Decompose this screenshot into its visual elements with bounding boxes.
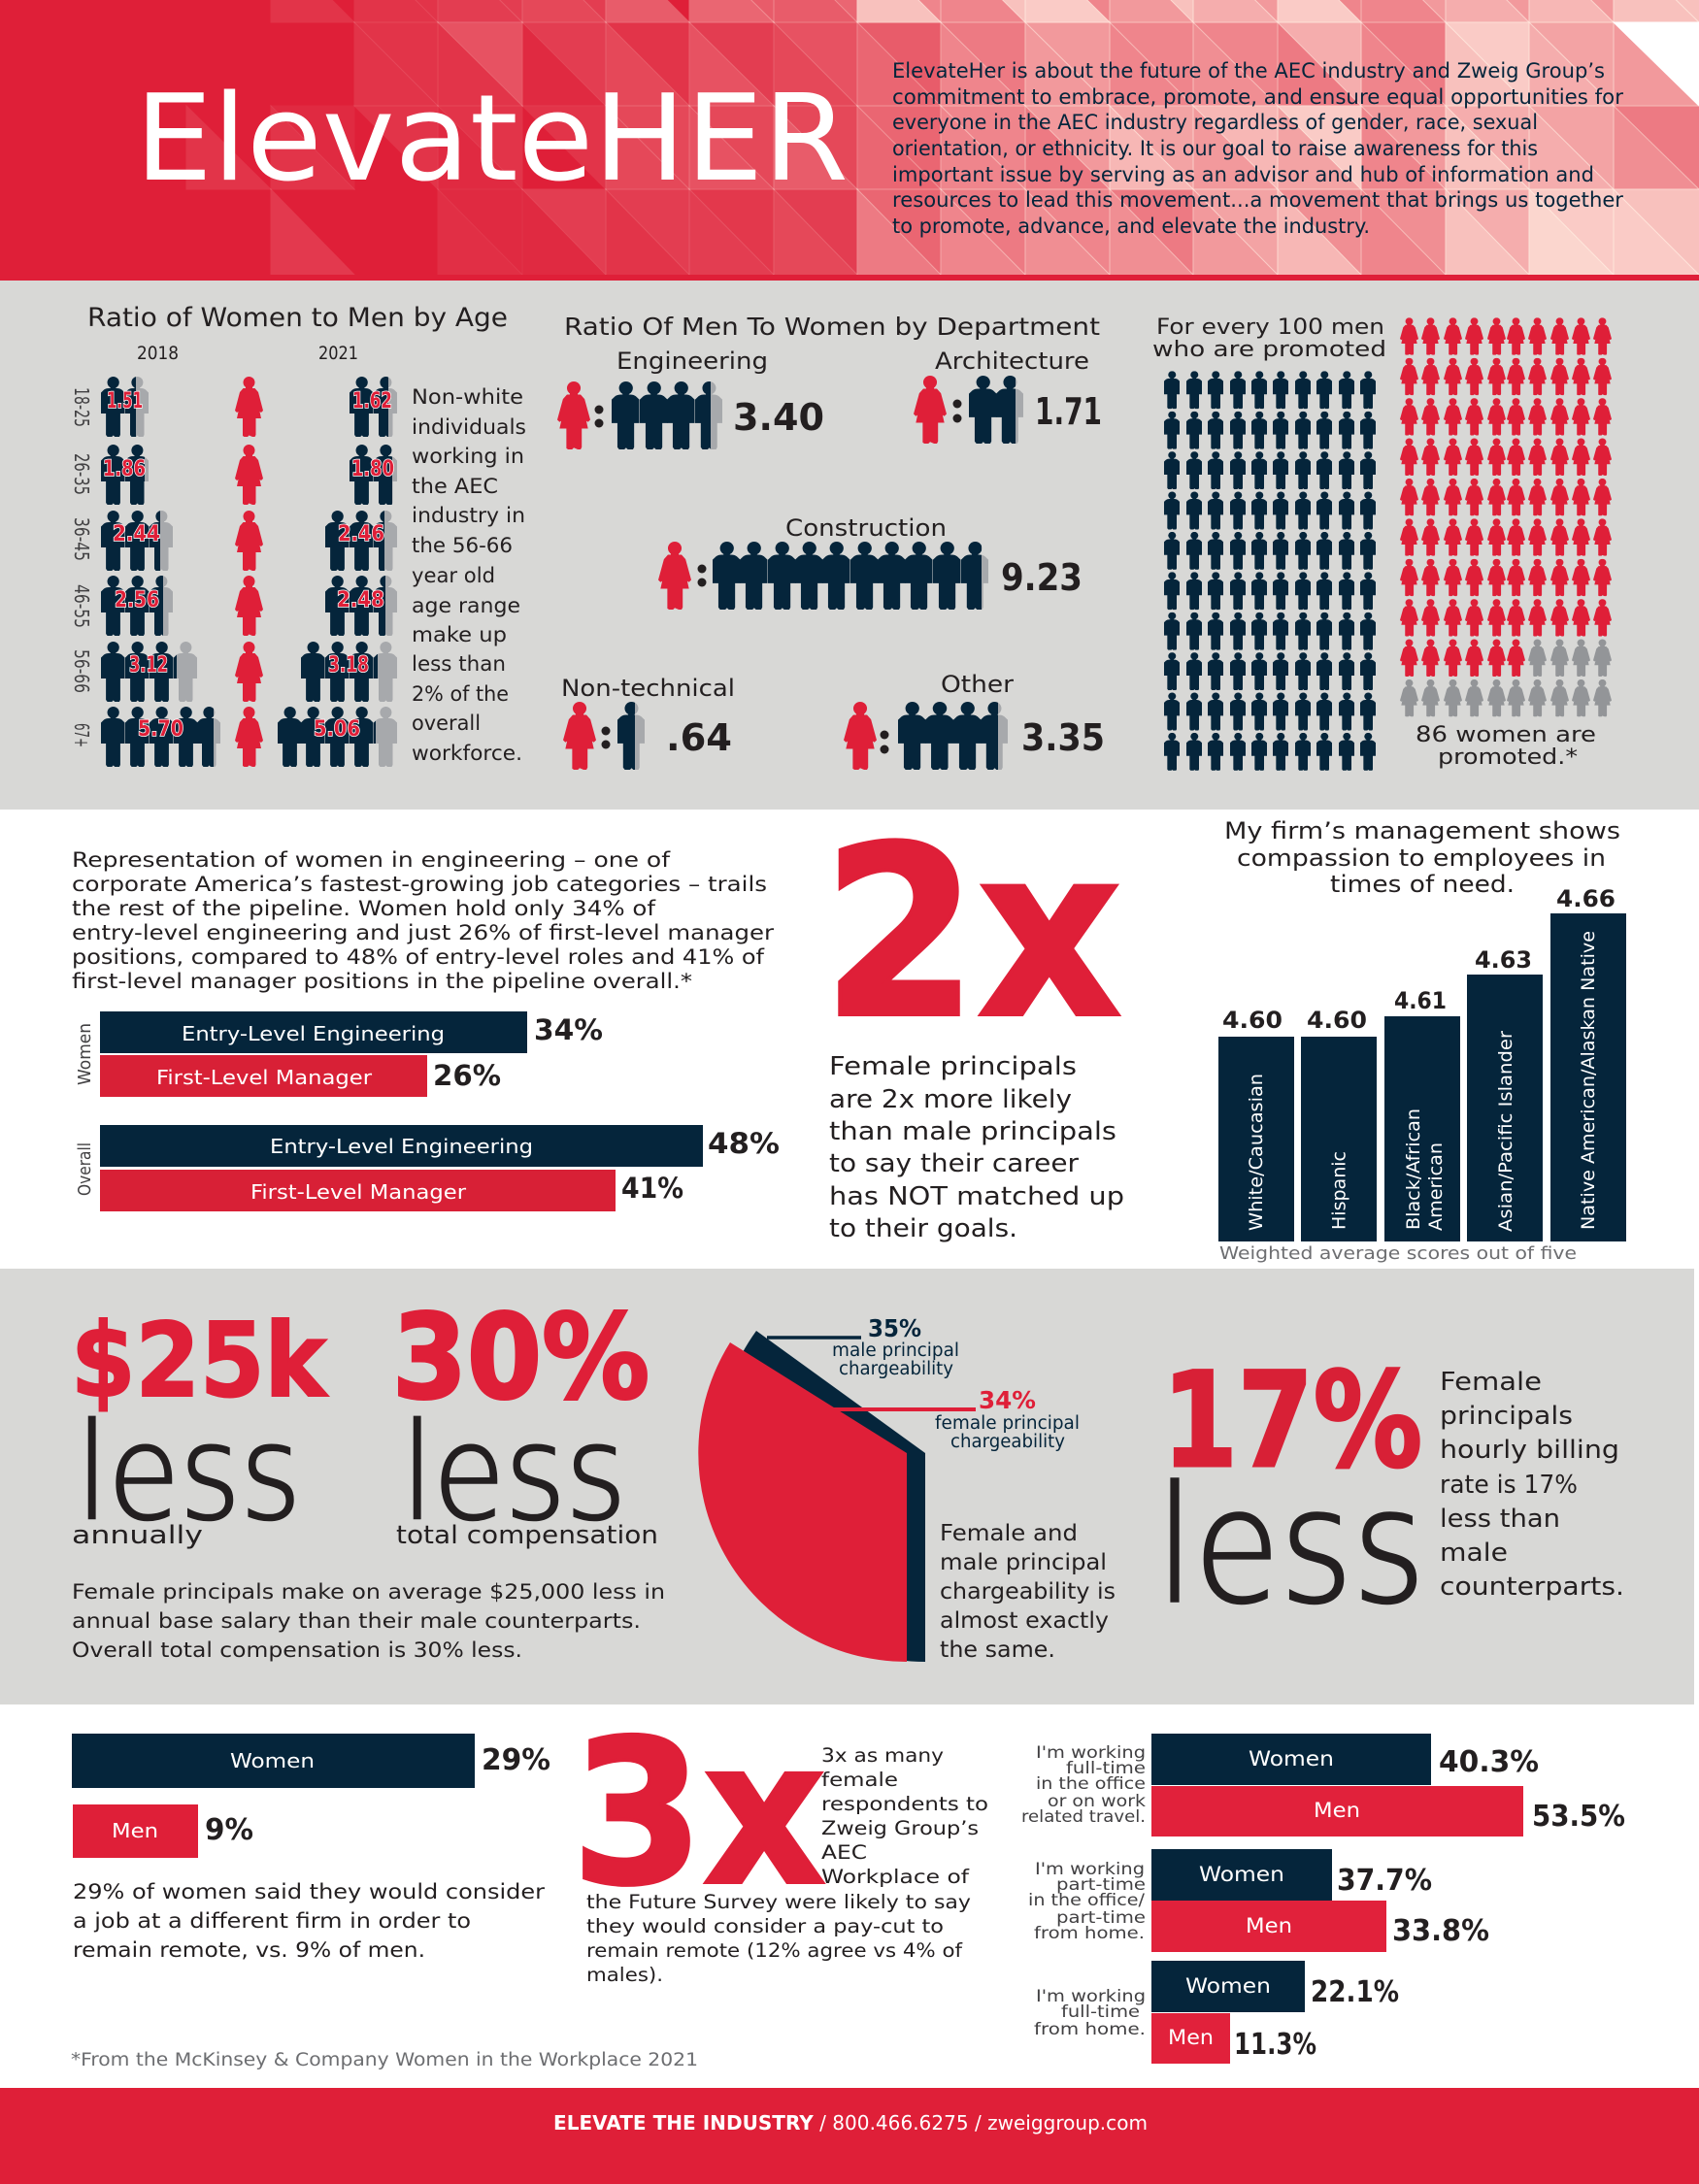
heading: Ratio Of Men To Women by Department <box>564 313 1100 341</box>
remote note: 29% of women said they would consider <box>73 1880 545 1904</box>
chart note: Weighted average scores out of five <box>1219 1243 1577 1264</box>
remote note: remain remote, vs. 9% of men. <box>73 1938 425 1963</box>
panel: engineering representation <box>72 848 780 1211</box>
description <box>72 1580 665 1663</box>
bar chart: work location: full-time <box>1066 1759 1146 1778</box>
stat: $25k less <box>71 1302 328 1555</box>
footnote: *From the McKinsey & Company Women in the Workplace 2021 <box>71 2050 698 2070</box>
bar chart: remote preference: 29% <box>482 1743 550 1777</box>
description: Overall total compensation is 30% less. <box>72 1638 522 1663</box>
header intro text: resources to lead this movement...a movement that brings us together <box>892 188 1623 212</box>
stat: 17% less: 17% <box>1162 1344 1422 1497</box>
heading: times of need. <box>1330 871 1515 898</box>
body text: positions, compared to 48% of entry-level roles and 41% of <box>72 945 765 969</box>
body text: the rest of the pipeline. Women hold only 34% of <box>72 897 656 920</box>
ratio values: 1.80 <box>351 457 394 481</box>
3x note: respondents to <box>821 1793 988 1815</box>
ratio values: 2.48 <box>337 588 384 612</box>
bar chart: representation: Entry-Level Engineering <box>270 1135 533 1158</box>
non-white note <box>412 385 526 765</box>
chargeability note: Female and <box>940 1521 1078 1546</box>
non-white note: Non-white <box>412 385 523 409</box>
bar values <box>1222 885 1616 1034</box>
caption women <box>1416 723 1596 770</box>
remote note: a job at a different firm in order to <box>73 1909 471 1934</box>
other: Other <box>941 671 1014 698</box>
center women icons <box>235 377 263 767</box>
section: ratio of women to men by age <box>70 303 526 767</box>
non-white note: year old <box>412 564 495 587</box>
non-white note: workforce. <box>412 742 522 765</box>
ratio values: 2.56 <box>115 588 159 612</box>
body text: corporate America’s fastest-growing job categories – trails <box>72 873 767 896</box>
heading: My firm’s management shows <box>1224 817 1620 844</box>
navy men icons 2018 <box>101 377 220 767</box>
ratio values: 1.62 <box>352 389 392 414</box>
billing rate note <box>1440 1368 1624 1602</box>
architecture: Architecture <box>935 347 1089 375</box>
stat: $25k less: $25k <box>71 1302 328 1420</box>
header intro text: ElevateHer is about the future of the AEC industry and Zweig Group’s <box>892 59 1605 83</box>
label: female chargeability: 34% <box>979 1386 1036 1414</box>
billing rate note: principals <box>1440 1402 1573 1431</box>
ratio values: 1.86 <box>103 457 146 481</box>
big number: 2x <box>822 797 1121 1071</box>
stat: 30% less <box>392 1291 658 1555</box>
label: male chargeability: chargeability <box>839 1359 953 1379</box>
age labels: 67+ <box>70 723 93 747</box>
column labels: 2018 <box>137 343 179 364</box>
engineering: Engineering <box>616 347 768 375</box>
bar chart: work location: 11.3% <box>1234 2028 1316 2062</box>
grid: 86 women <box>1400 317 1612 677</box>
heading men: For every 100 men <box>1156 315 1384 340</box>
bar labels: American <box>1425 1142 1447 1231</box>
ratio values: 2.46 <box>338 522 384 546</box>
bar chart: work location: part-time <box>1056 1875 1146 1895</box>
bar chart: work location: Men <box>1168 2026 1214 2049</box>
bar chart: work location: full-time <box>1061 2002 1140 2022</box>
description: Female principals make on average $25,000 less in <box>72 1580 665 1605</box>
engineering <box>557 347 824 449</box>
header intro text: everyone in the AEC industry regardless of gender, race, sexual <box>892 111 1538 134</box>
ratio values: 5.70 <box>138 717 183 742</box>
non-white note: the AEC <box>412 475 498 498</box>
billing rate note: counterparts. <box>1440 1572 1624 1602</box>
panel: remote work <box>71 1699 1625 2070</box>
non-white note: industry in <box>412 504 525 527</box>
chargeability note: the same. <box>940 1638 1055 1663</box>
heading <box>1224 817 1620 898</box>
bar chart: work location: 33.8% <box>1392 1914 1489 1948</box>
body text <box>72 848 774 993</box>
header intro text: commitment to embrace, promote, and ensure equal opportunities for <box>892 85 1623 109</box>
3x note: Workplace of <box>821 1866 970 1888</box>
stat: $25k less: less <box>76 1391 301 1555</box>
bar chart: work location: I'm working <box>1035 1860 1145 1879</box>
non-white note: overall <box>412 711 481 735</box>
bar chart: work location: 37.7% <box>1337 1864 1432 1898</box>
age labels <box>70 387 93 747</box>
bar chart: work location: in the office/ <box>1028 1891 1145 1910</box>
architecture: 1.71 <box>1035 390 1102 433</box>
bar chart: representation: Women <box>75 1023 95 1085</box>
stat: 30% less: less <box>401 1391 626 1555</box>
bar chart: work location: related travel. <box>1021 1807 1146 1827</box>
label: male chargeability <box>832 1314 959 1379</box>
bar labels: Asian/Pacific Islander <box>1495 1031 1516 1232</box>
bar chart: work location: Men <box>1314 1799 1360 1822</box>
3x note: Zweig Group’s <box>821 1817 979 1839</box>
grid: grey remainder women <box>1400 639 1612 716</box>
description: than male principals <box>829 1117 1116 1146</box>
stat: 17% less <box>1155 1344 1425 1645</box>
caption women: 86 women are <box>1416 723 1596 747</box>
bar chart: representation: 48% <box>708 1127 780 1160</box>
header intro text: important issue by serving as an advisor and hub of information and <box>892 163 1594 186</box>
non-white note: make up <box>412 623 507 646</box>
bar labels: Black/African <box>1403 1109 1424 1230</box>
bar labels <box>1246 931 1599 1232</box>
age labels: 26-35 <box>70 453 93 495</box>
billing rate note: male <box>1440 1539 1508 1568</box>
ratio values: 3.12 <box>129 653 168 678</box>
bar values: 4.60 <box>1222 1007 1283 1034</box>
grid: 100 men <box>1164 371 1376 771</box>
construction <box>658 514 1083 610</box>
3x note: female <box>821 1769 898 1791</box>
band background <box>0 1269 1694 1704</box>
chargeability note: almost exactly <box>940 1608 1109 1634</box>
label: male chargeability: 35% <box>868 1314 921 1342</box>
bar chart: work location: 53.5% <box>1532 1800 1625 1834</box>
column labels <box>137 343 358 364</box>
description: Female principals <box>829 1052 1077 1081</box>
non-white note: individuals <box>412 415 526 439</box>
construction: 9.23 <box>1001 556 1083 599</box>
heading: compassion to employees in <box>1237 844 1606 872</box>
heading men: who are promoted <box>1152 338 1386 362</box>
bar chart: remote preference <box>72 1734 550 1858</box>
bar chart: work location: in the office <box>1036 1774 1146 1794</box>
3x note: remain remote (12% agree vs 4% of <box>586 1939 963 1962</box>
section: promotions <box>1152 315 1612 771</box>
header triangle pattern <box>186 0 1699 275</box>
description: to say their career <box>829 1149 1079 1178</box>
non-technical <box>561 675 735 770</box>
ratio values: 1.51 <box>107 389 143 414</box>
label: female chargeability: female principal <box>935 1413 1080 1434</box>
age labels: 56-66 <box>70 649 93 693</box>
panel: ratios band <box>0 281 1699 810</box>
billing rate note: rate is 17% <box>1440 1471 1578 1500</box>
bar chart: work location: from home. <box>1034 1924 1145 1943</box>
grey remainder icons <box>125 377 397 767</box>
bar values: 4.60 <box>1307 1007 1367 1034</box>
3x note: the Future Survey were likely to say <box>586 1891 971 1913</box>
body text: first-level manager positions in the pipeline overall.* <box>72 970 692 993</box>
column labels: 2021 <box>318 343 358 364</box>
3x note: males). <box>586 1964 663 1986</box>
footer contact text: ELEVATE THE INDUSTRY / 800.466.6275 / zweiggroup.com <box>553 2111 1148 2134</box>
description <box>829 1052 1124 1243</box>
description: annual base salary than their male counterparts. <box>72 1609 641 1634</box>
title: ElevateHER <box>135 70 849 209</box>
ratio values: 3.18 <box>328 653 369 678</box>
architecture <box>914 347 1102 444</box>
bar chart: remote preference: Women <box>230 1749 315 1772</box>
billing rate note: hourly billing <box>1440 1436 1619 1465</box>
age labels: 46-55 <box>70 584 93 628</box>
ratio values <box>103 389 394 742</box>
age labels: 36-45 <box>70 517 93 561</box>
caption women: promoted.* <box>1438 745 1578 770</box>
bar chart: representation: First-Level Manager <box>250 1180 467 1204</box>
band background <box>0 281 1699 810</box>
construction: Construction <box>785 514 947 542</box>
bar values: 4.61 <box>1394 987 1447 1014</box>
pie chart: chargeability <box>698 1331 976 1662</box>
chargeability note <box>940 1521 1116 1663</box>
stat: $25k less: annually <box>72 1521 203 1550</box>
chargeability note: chargeability is <box>940 1579 1116 1605</box>
stat: 30% less: total compensation <box>396 1521 658 1550</box>
non-white note: working in <box>412 445 524 468</box>
ratio values: 5.06 <box>314 717 360 742</box>
header intro text: orientation, or ethnicity. It is our goal to raise awareness for this <box>892 137 1538 160</box>
bar labels: White/Caucasian <box>1246 1074 1267 1231</box>
bar values: 4.66 <box>1556 885 1616 912</box>
engineering: 3.40 <box>733 396 824 439</box>
panel: 2x stat <box>822 797 1124 1243</box>
bar chart: representation <box>75 1011 780 1211</box>
bar chart: remote preference: Men <box>112 1819 158 1842</box>
bar chart: work location: 22.1% <box>1311 1975 1399 2009</box>
footer band <box>0 2088 1699 2184</box>
section: ratio of men to women by department <box>557 313 1105 770</box>
bar chart: work location: Women <box>1249 1747 1334 1770</box>
3x note: AEC <box>821 1841 867 1864</box>
bar chart: representation: 41% <box>621 1172 683 1205</box>
heading: Ratio of Women to Men by Age <box>87 303 508 333</box>
bar chart: representation: Entry-Level Engineering <box>182 1022 445 1045</box>
billing rate note: less than <box>1440 1505 1560 1534</box>
bar chart: representation: Overall <box>75 1142 95 1196</box>
header intro text: to promote, advance, and elevate the industry. <box>892 215 1370 238</box>
panel: management compassion chart <box>1218 817 1626 1264</box>
bar chart: representation: 26% <box>433 1059 501 1092</box>
header bottom strip <box>0 275 1699 281</box>
non-white note: 2% of the <box>412 682 509 706</box>
bar chart: work location <box>1021 1734 1625 2064</box>
bar chart: work location: I'm working <box>1036 1743 1146 1763</box>
stat: 3x: 3x <box>572 1699 825 1930</box>
3x note <box>586 1744 988 1986</box>
remote note <box>73 1880 545 1963</box>
bar chart: work location: I'm working <box>1036 1987 1146 2006</box>
bar labels: Hispanic <box>1328 1151 1349 1230</box>
chargeability note: male principal <box>940 1550 1107 1575</box>
panel: pay gap band <box>0 1269 1694 1704</box>
non-white note: age range <box>412 594 520 617</box>
age labels: 18-25 <box>70 387 93 427</box>
bar chart: work location: or on work <box>1048 1792 1146 1811</box>
label: male chargeability: male principal <box>832 1340 959 1361</box>
bar chart: work location: 40.3% <box>1439 1745 1539 1779</box>
body text: Representation of women in engineering – one of <box>72 848 671 872</box>
navy men icons 2021 <box>278 377 397 767</box>
header red background <box>0 0 1699 281</box>
bars <box>1218 913 1626 1241</box>
3x note: they would consider a pay-cut to <box>586 1915 944 1937</box>
ratio values: 2.44 <box>113 522 160 546</box>
description: are 2x more likely <box>829 1085 1072 1114</box>
panel: header <box>0 0 1699 281</box>
label: female chargeability <box>935 1386 1080 1452</box>
bar chart: remote preference: 9% <box>205 1813 253 1847</box>
non-technical: .64 <box>666 716 732 759</box>
label: female chargeability: chargeability <box>950 1432 1065 1452</box>
bar chart: representation: First-Level Manager <box>156 1066 373 1089</box>
body text: entry-level engineering and just 26% of first-level manager <box>72 921 774 944</box>
bar labels: Native American/Alaskan Native <box>1578 931 1599 1230</box>
bar values: 4.63 <box>1475 946 1532 974</box>
other: 3.35 <box>1021 716 1105 759</box>
heading men <box>1152 315 1386 362</box>
bar chart: work location: part-time <box>1056 1908 1146 1928</box>
description: has NOT matched up <box>829 1182 1124 1211</box>
panel: footer <box>0 2088 1699 2184</box>
bar chart: work location: Women <box>1199 1863 1284 1886</box>
other <box>844 671 1105 770</box>
3x note: 3x as many <box>821 1744 944 1767</box>
bar chart: representation: 34% <box>534 1013 603 1046</box>
non-white note: less than <box>412 652 506 676</box>
bar chart: work location: from home. <box>1034 2020 1146 2039</box>
stat: 17% less: less <box>1155 1448 1425 1645</box>
bar chart: work location: Women <box>1185 1974 1271 1998</box>
bar chart: work location: Men <box>1246 1914 1292 1937</box>
header intro text <box>892 59 1623 238</box>
non-white note: the 56-66 <box>412 534 513 557</box>
billing rate note: Female <box>1440 1368 1542 1397</box>
stat: 30% less: 30% <box>392 1291 650 1426</box>
description: to their goals. <box>829 1214 1017 1243</box>
non-technical: Non-technical <box>561 675 735 702</box>
